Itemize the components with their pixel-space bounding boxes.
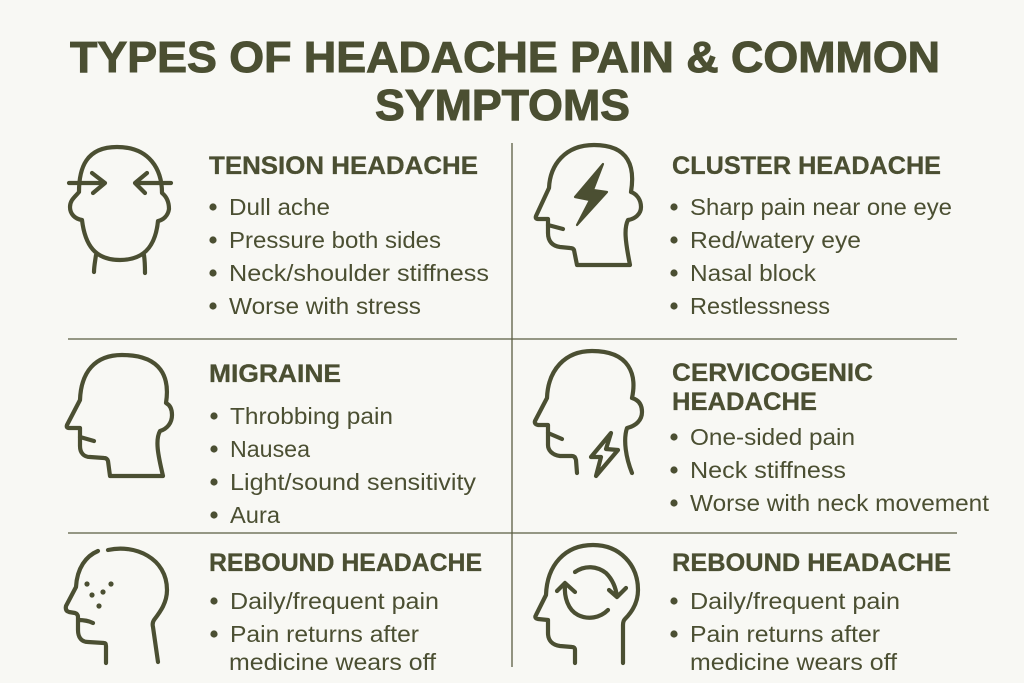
symptom list: medicine wears off (229, 649, 437, 675)
panel: migraine (67, 355, 477, 528)
symptom list: Throbbing pain (230, 403, 393, 429)
icon: side head with cycle arrows (535, 545, 638, 663)
symptom list: Aura (230, 502, 280, 528)
symptom list: Worse with neck movement (690, 490, 990, 516)
icon: side head outline (67, 355, 172, 476)
symptom list: Worse with stress (229, 293, 421, 319)
symptom list (209, 194, 489, 319)
symptom list: Pressure both sides (229, 227, 441, 253)
symptom list: Nasal block (690, 260, 817, 286)
title: TYPES OF HEADACHE PAIN & COMMON (70, 33, 940, 82)
symptom list: One-sided pain (690, 424, 855, 450)
symptom list (210, 403, 477, 528)
panel: cluster headache (536, 145, 952, 319)
panel: tension headache (69, 147, 489, 319)
panel: rebound headache left (66, 549, 482, 675)
symptom list: Dull ache (229, 194, 330, 220)
symptom list: Nausea (230, 436, 310, 462)
heading: TENSION HEADACHE (209, 152, 478, 180)
symptom list: Sharp pain near one eye (690, 194, 952, 220)
panel: rebound headache right (535, 545, 951, 675)
symptom list (210, 588, 439, 675)
title (70, 33, 940, 130)
symptom list (670, 424, 990, 516)
heading: CLUSTER HEADACHE (672, 152, 941, 180)
symptom list: Neck/shoulder stiffness (229, 260, 489, 286)
symptom list (670, 194, 952, 319)
icon: side head with lightning bolt (536, 145, 641, 265)
symptom list: Daily/frequent pain (230, 588, 439, 614)
icon: side head with dots (66, 549, 167, 663)
heading: REBOUND HEADACHE (672, 549, 951, 577)
title: SYMPTOMS (375, 81, 630, 130)
heading: MIGRAINE (209, 360, 341, 388)
symptom list: Neck stiffness (690, 457, 846, 483)
symptom list: medicine wears off (690, 649, 898, 675)
heading: HEADACHE (672, 388, 817, 416)
icon: side head with neck bolt (535, 351, 642, 476)
heading (672, 359, 873, 416)
symptom list: Restlessness (690, 293, 830, 319)
symptom list: Pain returns after (690, 621, 880, 647)
panel: cervicogenic headache (535, 351, 990, 516)
icon: front head with pressure arrows (69, 147, 171, 273)
symptom list: Pain returns after (230, 621, 419, 647)
symptom list: Light/sound sensitivity (230, 469, 477, 495)
symptom list (670, 588, 900, 675)
heading: CERVICOGENIC (672, 359, 873, 387)
symptom list: Daily/frequent pain (690, 588, 900, 614)
heading: REBOUND HEADACHE (209, 549, 482, 577)
symptom list: Red/watery eye (690, 227, 861, 253)
